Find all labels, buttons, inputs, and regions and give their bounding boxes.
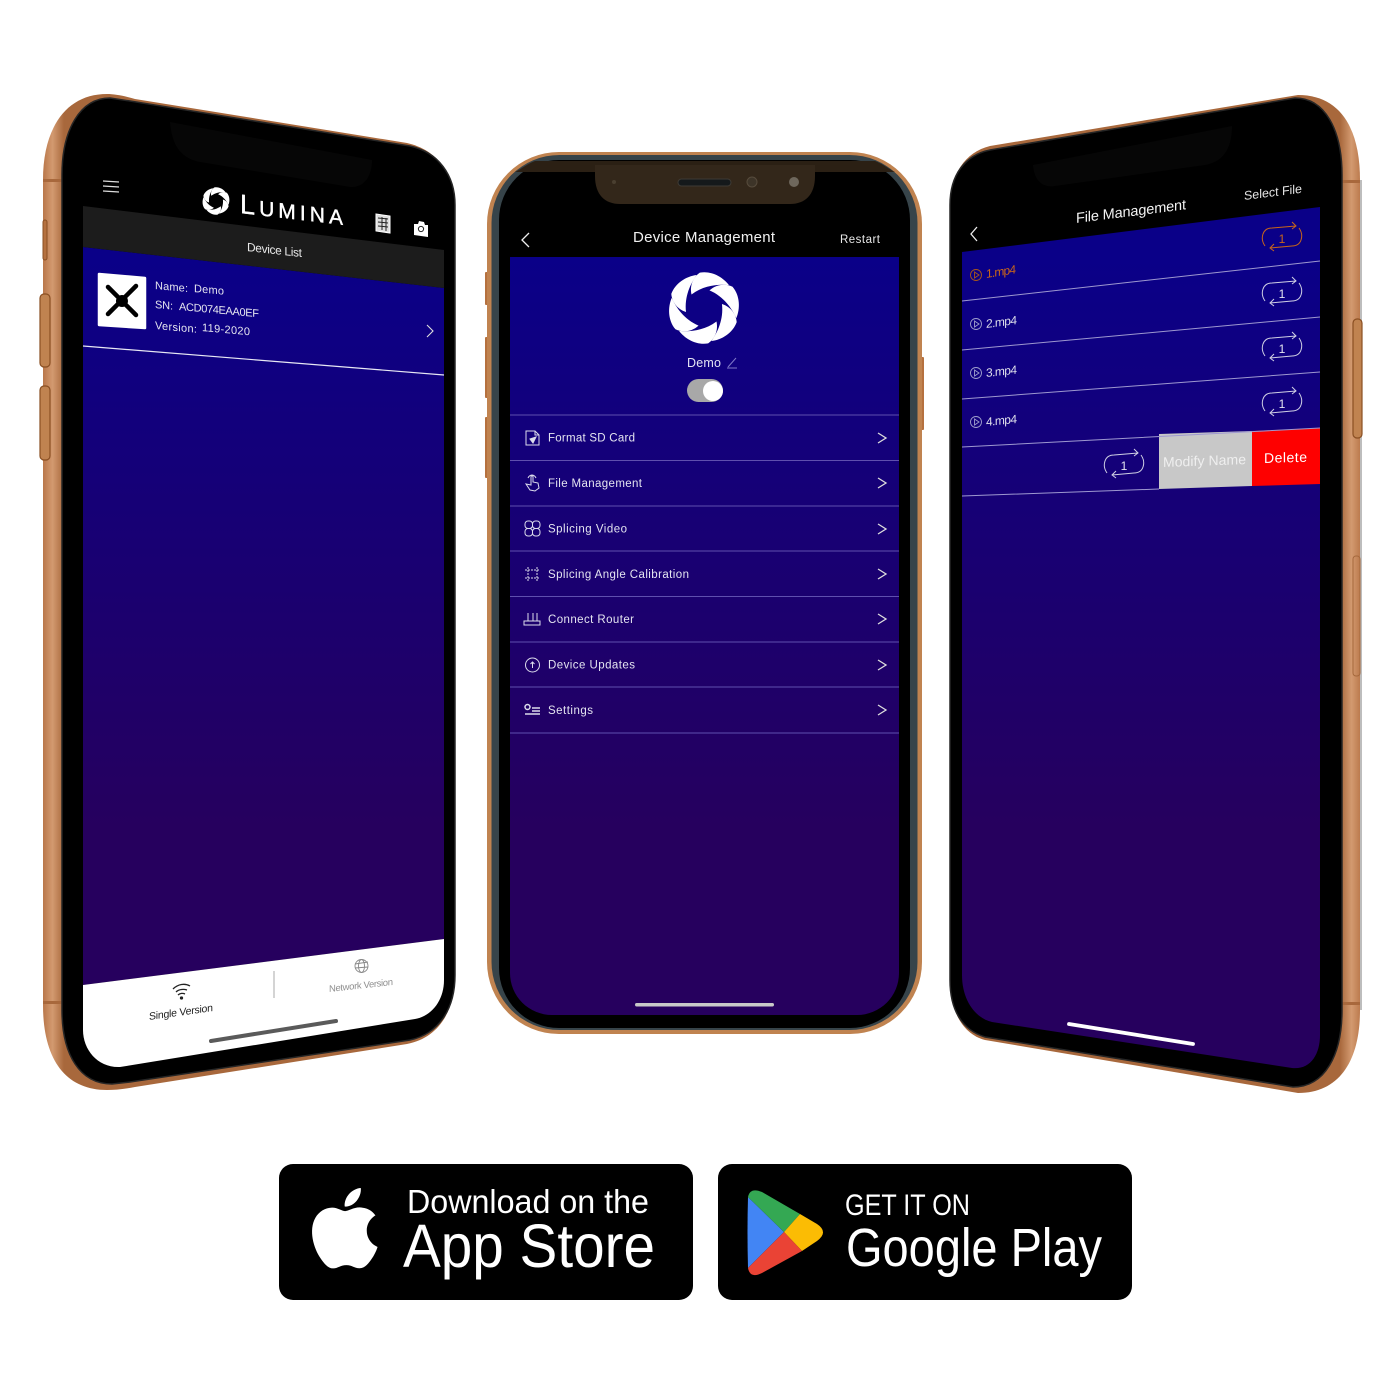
phone: device management (center): [485, 152, 924, 1034]
text: Google Play: Google Play: [846, 1218, 1102, 1278]
device list bar: [83, 206, 444, 288]
device details: Demo: [194, 283, 224, 298]
label: Modify Name: Modify Name: [1163, 451, 1246, 470]
delete action: [1252, 428, 1320, 486]
Lumina logo: [661, 269, 747, 347]
file rows: 1: [1279, 232, 1286, 246]
file rows: 4.mp4: [986, 412, 1017, 429]
document icon: [376, 214, 390, 233]
blue screen background: [83, 247, 444, 985]
device name: Demo: [687, 356, 721, 370]
toggle: [687, 379, 723, 402]
pen icon: [727, 358, 737, 368]
menu list: Device Updates: [548, 660, 635, 672]
heading: File Management: File Management: [1076, 197, 1186, 227]
text: App Store: App Store: [403, 1212, 655, 1280]
Lumina wordmark: LUMINA: [240, 188, 343, 231]
play icons: [970, 270, 982, 428]
globe icon: [355, 960, 368, 972]
modify name action: [1159, 431, 1252, 489]
menu list: Format SD Card: [548, 432, 635, 444]
menu list: Connect Router: [548, 614, 634, 626]
home indicator: [211, 1021, 336, 1041]
text: GET IT ON: GET IT ON: [845, 1189, 970, 1222]
device thumbnail: [99, 274, 145, 328]
file rows: 1: [1279, 397, 1286, 411]
back chevron: [522, 233, 529, 247]
device details: Version:: [155, 320, 197, 336]
menu list: Settings: [548, 705, 593, 717]
phone: device list (left): [40, 94, 455, 1090]
notch: [1033, 126, 1232, 186]
device details: SN:: [155, 299, 173, 313]
label: Delete: Delete: [1264, 449, 1307, 466]
Lumina logo small: [199, 186, 233, 216]
file rows: 1.mp4: [986, 262, 1016, 281]
icon: play triangle: [748, 1190, 823, 1275]
device details: 119-2020: [202, 322, 250, 338]
text: Download on the: Download on the: [407, 1183, 649, 1220]
action: Restart: Restart: [840, 234, 881, 246]
file rows: 1: [1121, 459, 1128, 473]
wifi icon: [173, 984, 190, 999]
menu list: [510, 415, 899, 733]
label: Single Version: Single Version: [149, 1002, 213, 1023]
chevron: [427, 325, 433, 337]
device details: Name:: [155, 280, 188, 295]
menu list: File Management: [548, 478, 643, 490]
home indicator: [1069, 1024, 1193, 1044]
action: Select File: Select File: [1244, 182, 1302, 203]
phone: file management (right): [950, 95, 1362, 1093]
menu list: Splicing Video: [548, 524, 627, 536]
blue screen background: [510, 257, 899, 1017]
label: Network Version: Network Version: [329, 977, 393, 995]
badge: Google Play: [718, 1164, 1132, 1300]
file rows: 2.mp4: [986, 313, 1017, 331]
back chevron: [971, 227, 977, 241]
file rows: 1: [1279, 342, 1286, 356]
menu icon: [103, 181, 119, 192]
badge: App Store: [279, 1164, 693, 1300]
file rows: [962, 222, 1320, 496]
device details: ACD074EAA0EF: [179, 301, 259, 320]
blue screen background: [962, 207, 1320, 1085]
notch: [170, 122, 372, 187]
menu list: Splicing Angle Calibration: [548, 569, 689, 581]
home indicator: [635, 1003, 774, 1006]
heading: Device List: Device List: [247, 240, 303, 260]
icon: apple: [312, 1188, 378, 1268]
bottom tab bar: [83, 939, 444, 1067]
file rows: 3.mp4: [986, 363, 1017, 380]
notch: [515, 161, 895, 204]
camera icon: [414, 221, 428, 237]
menu icons: [524, 431, 540, 714]
loop icons: [1104, 222, 1302, 478]
heading: Device Management: Device Management: [633, 229, 776, 246]
file rows: 1: [1279, 287, 1286, 301]
device details: [155, 280, 259, 338]
